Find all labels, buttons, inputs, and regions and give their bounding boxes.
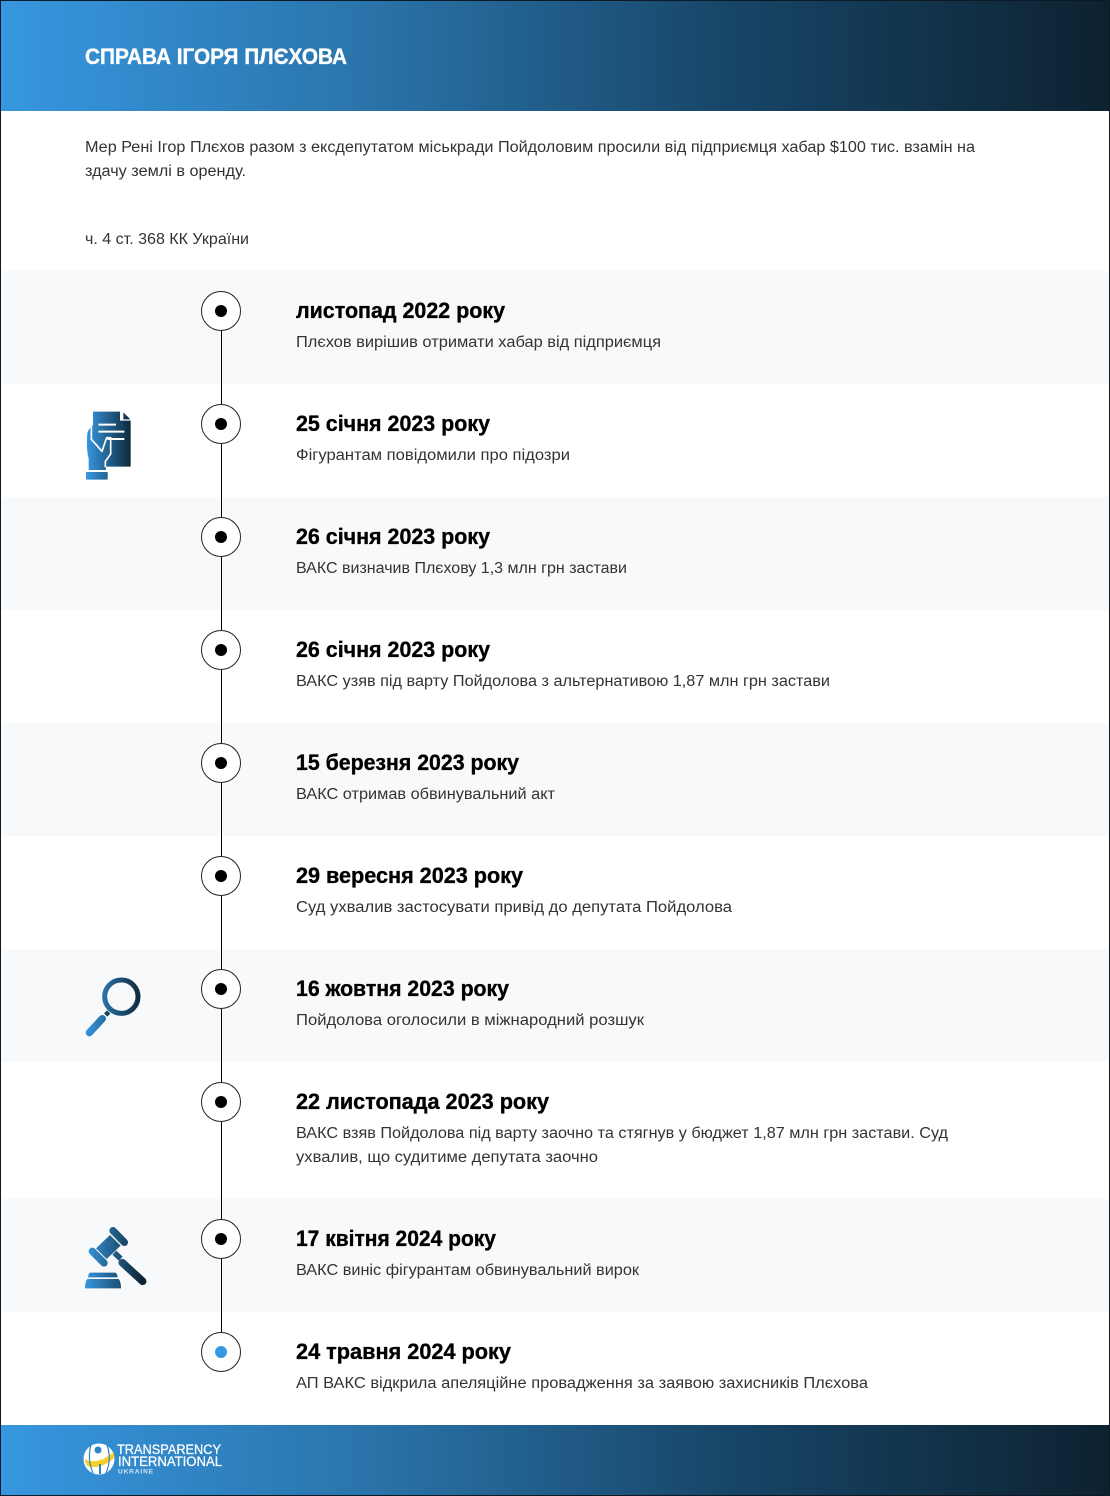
event: 26 січня 2023 (Пойдолов): ВАКС узяв під варту Пойдолова з альтернативою 1,87 млн грн застави xyxy=(296,673,830,690)
title: СПРАВА ІГОРЯ ПЛЄХОВА xyxy=(85,44,347,69)
event: 25 січня 2023: 25 січня 2023 року xyxy=(296,411,491,436)
event: 26 січня 2023 (Пойдолов) xyxy=(296,637,830,690)
event: листопад 2022 xyxy=(296,298,661,351)
event: 26 січня 2023: 26 січня 2023 року xyxy=(296,524,491,549)
event: 29 вересня 2023: 29 вересня 2023 року xyxy=(296,863,524,888)
event: 26 січня 2023: ВАКС визначив Плєхову 1,3 млн грн застави xyxy=(296,560,627,577)
icon: hand with document xyxy=(86,412,131,480)
event: 25 січня 2023: Фігурантам повідомили про підозри xyxy=(296,447,570,464)
intro text: здачу землі в оренду. xyxy=(85,163,246,180)
footer band xyxy=(0,1425,1110,1496)
event: 26 січня 2023 xyxy=(296,524,627,577)
event: 22 листопада 2023: 22 листопада 2023 року xyxy=(296,1089,550,1114)
event: 15 березня 2023: 15 березня 2023 року xyxy=(296,750,520,775)
event: 24 травня 2024: АП ВАКС відкрила апеляційне провадження за заявою захисників Плєхова xyxy=(296,1375,868,1392)
logo globe xyxy=(84,1444,114,1474)
intro text: Мер Рені Ігор Плєхов разом з ексдепутатом міськради Пойдоловим просили від підприємця хабар $100 тис. взамін на xyxy=(85,139,975,156)
event: 26 січня 2023 (Пойдолов): 26 січня 2023 року xyxy=(296,637,491,662)
event: 17 квітня 2024: ВАКС виніс фігурантам обвинувальний вирок xyxy=(296,1262,639,1279)
event: 16 жовтня 2023: 16 жовтня 2023 року xyxy=(296,976,510,1001)
icon: gavel xyxy=(85,1231,143,1288)
event: 22 листопада 2023: ВАКС взяв Пойдолова під варту заочно та стягнув у бюджет 1,87 млн грн застави. Суд xyxy=(296,1125,948,1142)
logo: Transparency International Ukraine: INTERNATIONAL xyxy=(118,1453,222,1469)
intro text xyxy=(85,139,975,180)
event: 15 березня 2023 xyxy=(296,750,555,803)
event: листопад 2022: листопад 2022 року xyxy=(296,298,506,323)
timeline markers xyxy=(202,292,240,1372)
event: 24 травня 2024 xyxy=(296,1339,868,1392)
logo: Transparency International Ukraine: UKRAINE xyxy=(118,1468,154,1476)
timeline line xyxy=(220,311,222,1352)
event: 22 листопада 2023 xyxy=(296,1089,948,1166)
event: 16 жовтня 2023 xyxy=(296,976,644,1029)
icon: magnifying glass xyxy=(89,980,138,1033)
event: 15 березня 2023: ВАКС отримав обвинувальний акт xyxy=(296,786,555,803)
event: 17 квітня 2024 xyxy=(296,1226,639,1279)
header band xyxy=(0,0,1110,111)
logo: Transparency International Ukraine xyxy=(84,1441,222,1476)
logo: Transparency International Ukraine: TRANSPARENCY xyxy=(117,1441,222,1457)
event: 25 січня 2023 xyxy=(296,411,570,464)
event: 29 вересня 2023: Суд ухвалив застосувати привід до депутата Пойдолова xyxy=(296,899,732,916)
event: 22 листопада 2023: ухвалив, що судитиме депутата заочно xyxy=(296,1149,598,1166)
event: листопад 2022: Плєхов вирішив отримати хабар від підприємця xyxy=(296,334,661,351)
event: 16 жовтня 2023: Пойдолова оголосили в міжнародний розшук xyxy=(296,1012,644,1029)
row backgrounds xyxy=(1,271,1109,1312)
event: 29 вересня 2023 xyxy=(296,863,732,916)
legal article: ч. 4 ст. 368 КК України xyxy=(85,231,249,248)
event: 24 травня 2024: 24 травня 2024 року xyxy=(296,1339,512,1364)
event: 17 квітня 2024: 17 квітня 2024 року xyxy=(296,1226,497,1251)
